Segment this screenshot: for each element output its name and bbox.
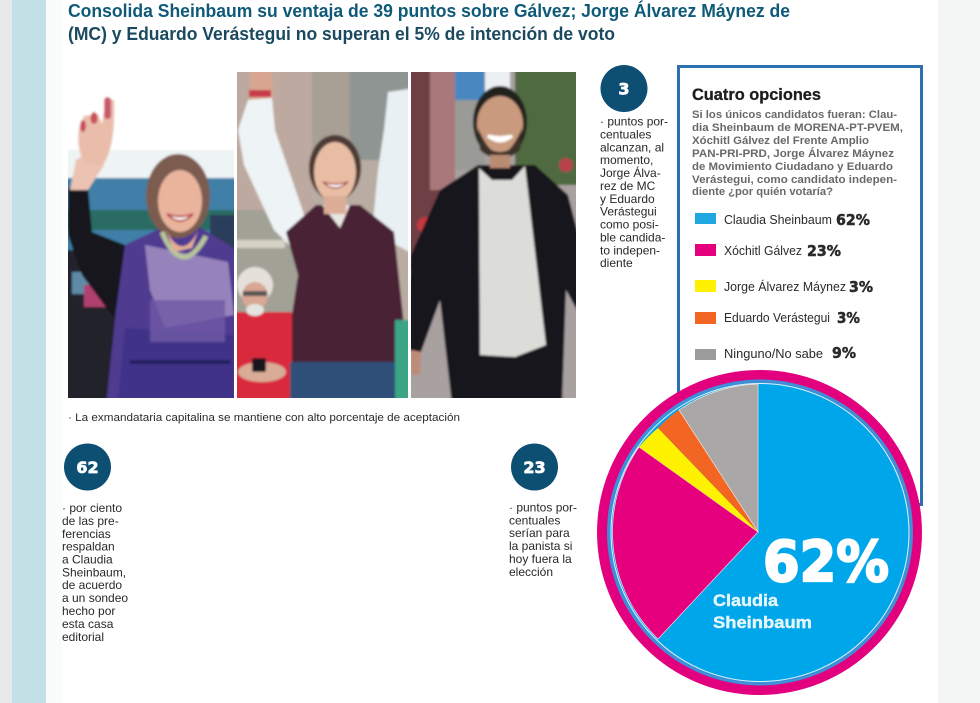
stat: 3 puntos bbox=[600, 65, 671, 270]
stat text 3: Verástegui bbox=[600, 205, 657, 219]
title: (MC) y Eduardo Verástegui no superan el 5% de intención de voto bbox=[68, 24, 615, 44]
stat text 3: como posi- bbox=[600, 218, 659, 232]
photo: Jorge Álvarez Máynez bbox=[411, 72, 576, 398]
stat text 62: Sheinbaum, bbox=[62, 565, 126, 579]
stat text 23: la panista si bbox=[509, 539, 572, 553]
stat text 62: de las pre- bbox=[62, 514, 119, 528]
stat text 23: elección bbox=[509, 565, 553, 579]
stat: 62 por ciento bbox=[62, 444, 131, 644]
survey question: diente ¿por quién votaría? bbox=[692, 186, 833, 198]
survey question: Verástegui, como candidato indepen- bbox=[692, 174, 897, 186]
stat badge 3: 3 bbox=[618, 80, 630, 98]
slice: Jorge Álvarez Máynez 3% bbox=[639, 428, 758, 532]
stat text 62: hecho por bbox=[62, 604, 115, 618]
stat text 62: ferencias bbox=[62, 527, 111, 541]
stat text 62: de acuerdo bbox=[62, 578, 122, 592]
stat badge 23: 23 bbox=[523, 458, 546, 477]
legend: Ninguno/No sabe: Ninguno/No sabe bbox=[724, 347, 823, 361]
stat text 3: centuales bbox=[600, 127, 651, 141]
survey question: de Movimiento Ciudadano y Eduardo bbox=[692, 161, 893, 173]
stat text 62: · por ciento bbox=[62, 501, 122, 515]
stat text 3: to indepen- bbox=[600, 243, 660, 257]
stat text 23: hoy fuera la bbox=[509, 552, 572, 566]
stat text 3: alcanzan, al bbox=[600, 140, 664, 154]
legend: Claudia Sheinbaum: 62% bbox=[836, 211, 870, 229]
stat text 3: rez de MC bbox=[600, 179, 656, 193]
stat text 3: diente bbox=[600, 256, 633, 270]
stat text 3: momento, bbox=[600, 153, 653, 167]
stat text 62: a Claudia bbox=[62, 552, 113, 566]
pie value: 62% bbox=[763, 530, 889, 595]
legend: Ninguno/No sabe: 9% bbox=[832, 344, 856, 362]
stat badge 3 bbox=[600, 65, 648, 112]
legend: Claudia Sheinbaum: Claudia Sheinbaum bbox=[724, 213, 832, 227]
panel heading: Cuatro opciones bbox=[692, 85, 821, 104]
survey question: PAN-PRI-PRD, Jorge Álvarez Máynez bbox=[692, 147, 895, 160]
legend: Xóchitl Gálvez: Xóchitl Gálvez bbox=[724, 244, 802, 258]
title bbox=[68, 0, 790, 44]
stat text 62: a un sondeo bbox=[62, 591, 128, 605]
stat text 3: y Eduardo bbox=[600, 192, 655, 206]
slice: Eduardo Verástegui 3% bbox=[658, 410, 758, 532]
stat badge 62 bbox=[64, 444, 111, 490]
legend: Eduardo Verástegui: Eduardo Verástegui bbox=[724, 311, 830, 325]
legend: Eduardo Verástegui: 3% bbox=[837, 309, 860, 327]
title: Consolida Sheinbaum su ventaja de 39 puntos sobre Gálvez; Jorge Álvarez Máynez de bbox=[68, 0, 790, 21]
legend: Xóchitl Gálvez bbox=[695, 242, 841, 260]
photo: Claudia Sheinbaum bbox=[237, 72, 408, 398]
stat text 3: Jorge Álva- bbox=[600, 165, 661, 180]
stat text 62: editorial bbox=[62, 630, 104, 644]
pie label: Claudia bbox=[713, 592, 779, 610]
legend: Eduardo Verástegui bbox=[695, 309, 860, 327]
legend: Jorge Álvarez Máynez bbox=[695, 278, 873, 296]
stat text 23: · puntos por- bbox=[509, 500, 577, 514]
photo caption: · La exmandataria capitalina se mantiene con alto porcentaje de aceptación bbox=[68, 412, 460, 424]
slice: Xóchitl Gálvez 23% bbox=[613, 447, 758, 639]
pie label bbox=[713, 592, 812, 632]
survey question: Si los únicos candidatos fueran: Clau- bbox=[692, 109, 897, 121]
pie label: Sheinbaum bbox=[713, 614, 812, 632]
panel: cuatro opciones bbox=[678, 66, 922, 504]
stat text 3: ble candida- bbox=[600, 230, 665, 244]
legend: Xóchitl Gálvez: 23% bbox=[807, 242, 841, 260]
stat text 3: · puntos por- bbox=[600, 114, 668, 128]
legend: Ninguno/No sabe bbox=[695, 344, 856, 362]
stat text 23: serían para bbox=[509, 526, 570, 540]
legend: Jorge Álvarez Máynez: 3% bbox=[849, 278, 873, 296]
survey question bbox=[692, 109, 903, 198]
stat text 62: respaldan bbox=[62, 540, 115, 554]
stat badge 62: 62 bbox=[76, 458, 99, 477]
legend: Claudia Sheinbaum bbox=[695, 211, 870, 229]
pie chart bbox=[597, 370, 922, 695]
stat text 62: esta casa bbox=[62, 617, 114, 631]
survey question: Xóchitl Gálvez del Frente Amplio bbox=[692, 135, 869, 147]
survey question: dia Sheinbaum de MORENA-PT-PVEM, bbox=[692, 122, 903, 134]
stat: 23 puntos bbox=[509, 444, 580, 579]
photo: Xóchitl Gálvez bbox=[68, 96, 234, 398]
slice: Ninguno 9% bbox=[679, 384, 758, 532]
legend: Jorge Álvarez Máynez: Jorge Álvarez Máynez bbox=[724, 279, 846, 294]
stat text 23: centuales bbox=[509, 513, 560, 527]
